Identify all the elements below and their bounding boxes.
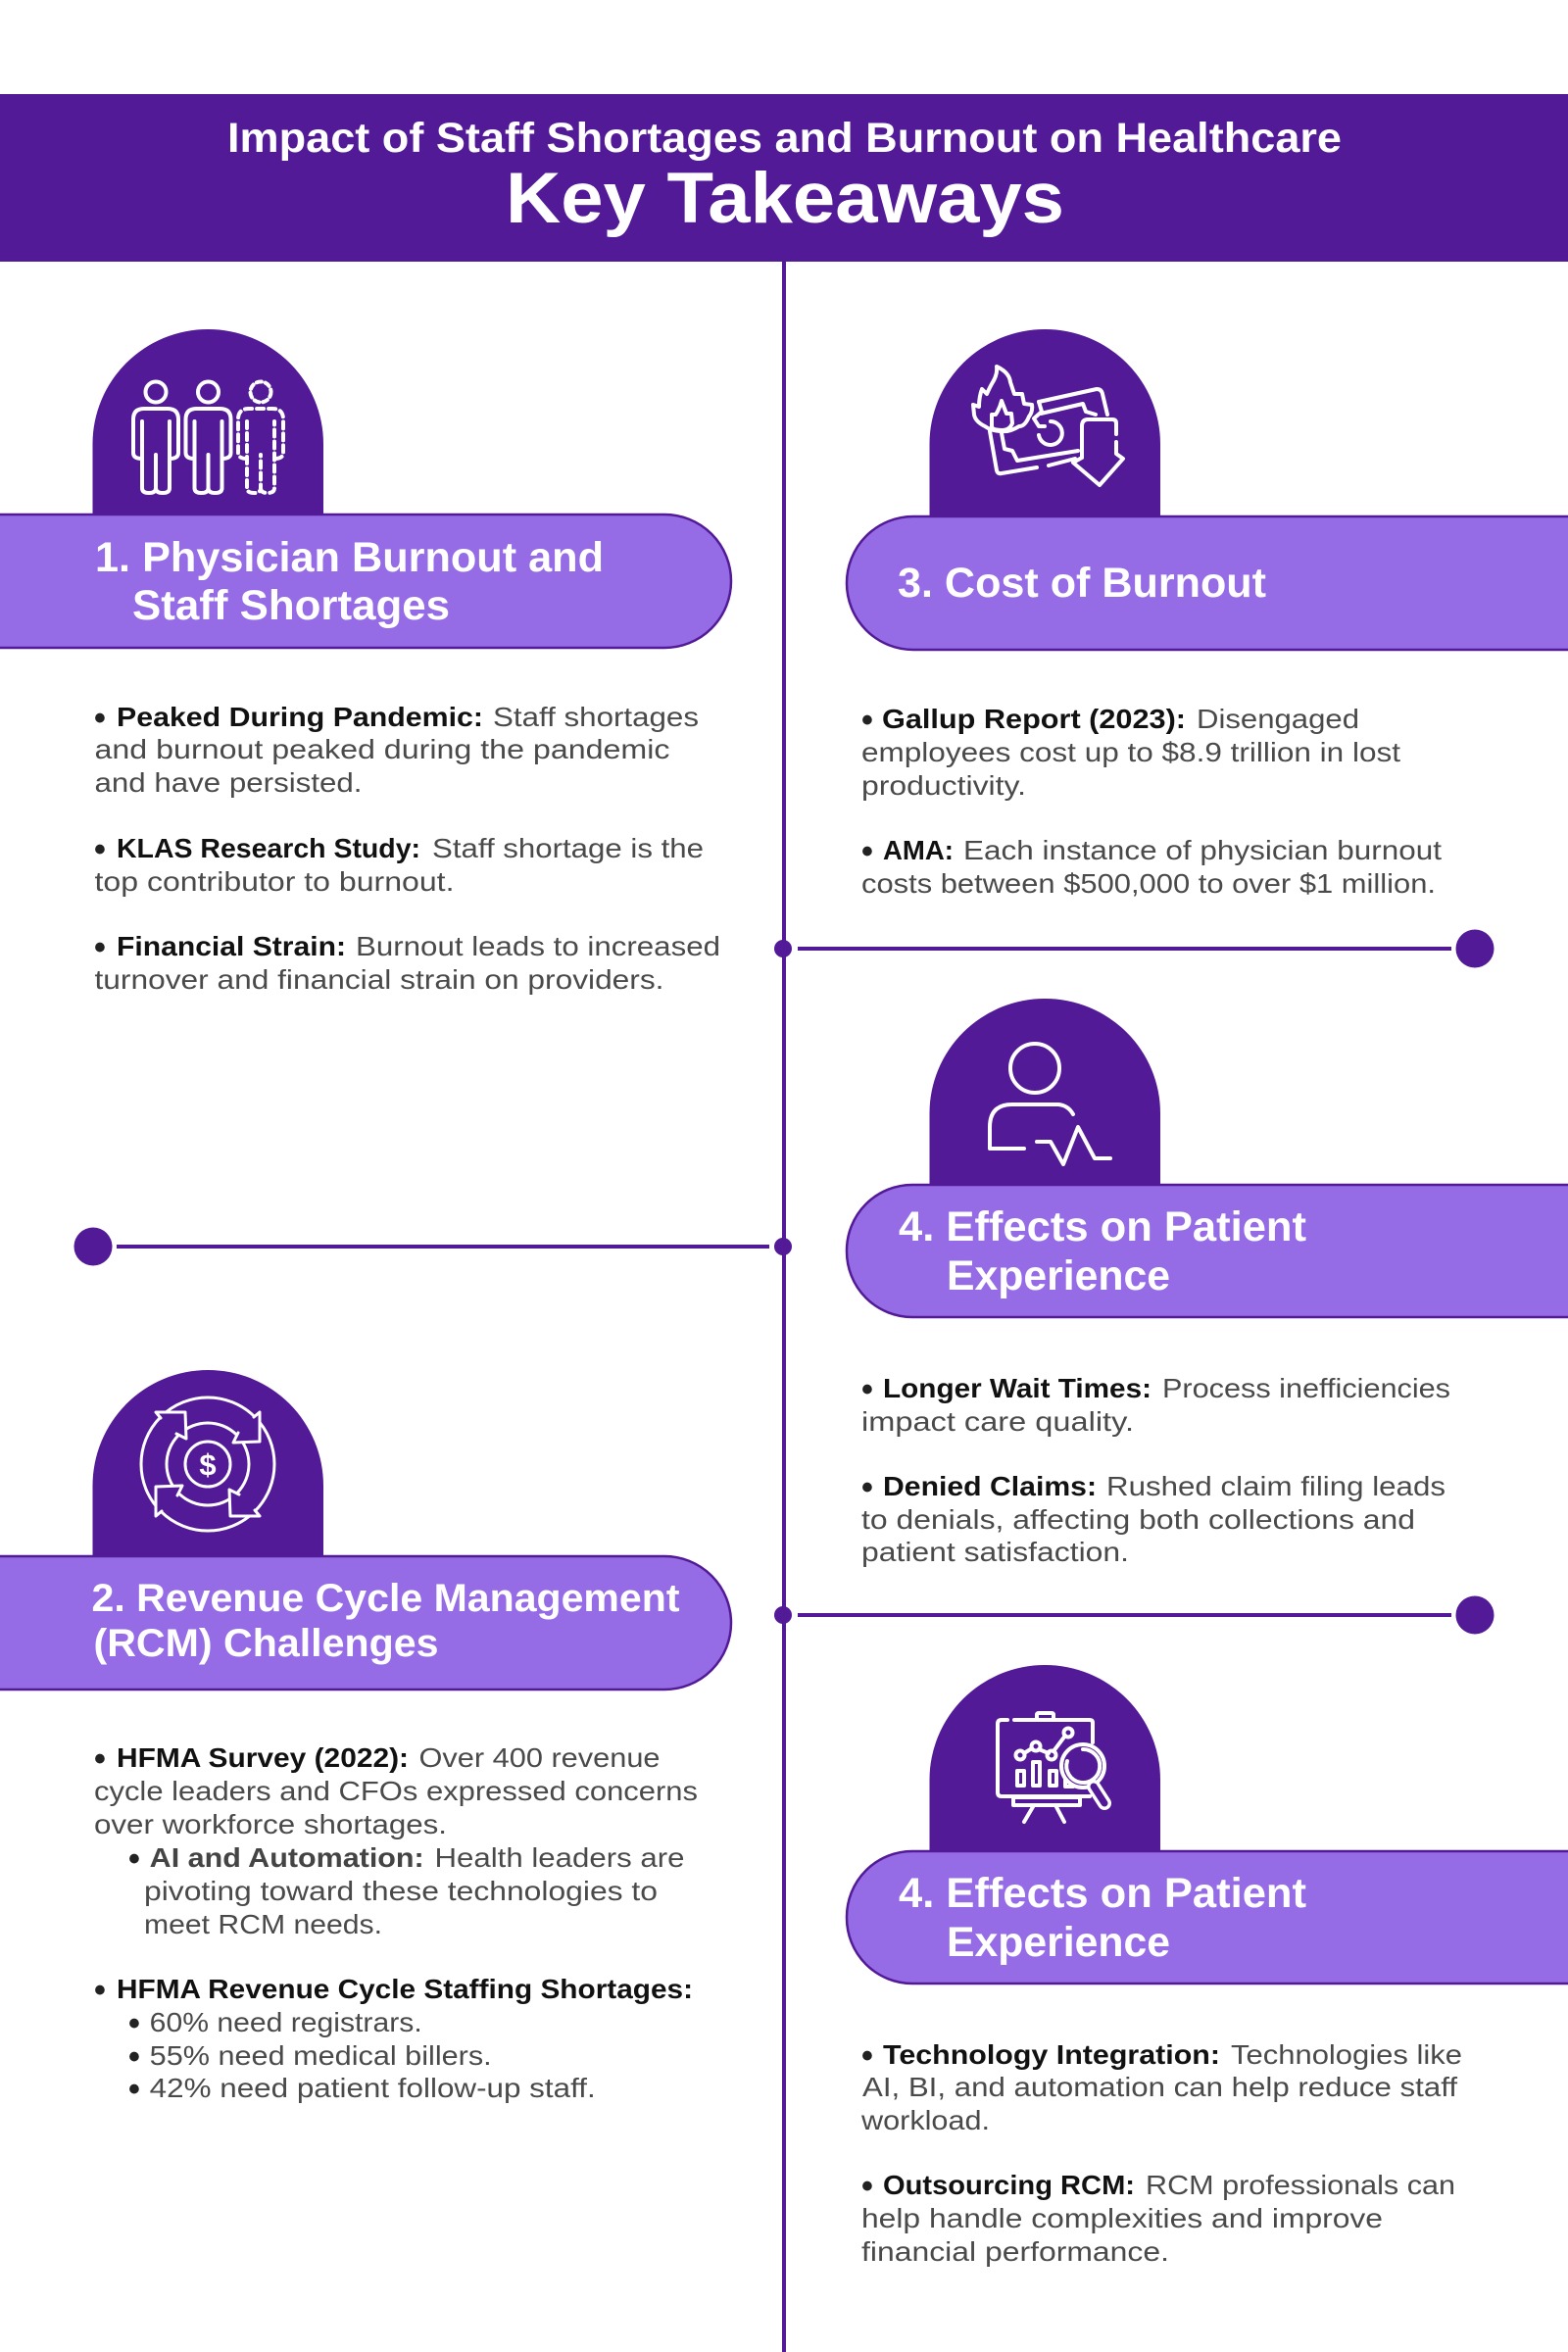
bullet: AMA: Each instance of physician burnout — [963, 835, 1442, 865]
bullet: HFMA survey: Over 400 revenue — [419, 1742, 661, 1773]
bullet: technology integration: workload. — [860, 2105, 990, 2135]
bullet: HFMA staffing shortages: • — [128, 2005, 140, 2042]
bullet: outsourcing RCM: financial performance. — [861, 2236, 1169, 2267]
bullet: denied claims: Denied Claims: — [883, 1471, 1097, 1501]
subtitle: Impact of Staff Shortages and Burnout on Healthcare — [227, 115, 1342, 162]
sub-bullet: AI and automation: • — [128, 1840, 140, 1878]
bullet: HFMA staffing shortages — [94, 1972, 693, 2108]
bullet: Gallup report: employees cost up to $8.9 trillion in lost — [861, 737, 1400, 767]
bullet: financial strain: Burnout leads to increased — [356, 931, 720, 961]
bullet: longer wait times: Longer Wait Times: — [883, 1373, 1152, 1403]
heading pill: 2. Revenue Cycle Management — [92, 1577, 680, 1620]
connector: section 4 to section 5 — [774, 1595, 1494, 1635]
heading pill: 4. Effects on Patient — [899, 1870, 1306, 1917]
bullet: technology integration: • — [861, 2037, 873, 2075]
bullet: denied claims: patient satisfaction. — [861, 1537, 1129, 1567]
bullet: KLAS research study — [94, 831, 704, 897]
sub-bullet: AI and automation — [128, 1840, 684, 1939]
bullet: outsourcing RCM: • — [861, 2168, 873, 2205]
heading pill: Staff Shortages — [132, 582, 450, 629]
bullet: outsourcing RCM — [861, 2168, 1455, 2267]
bullet: peaked during pandemic: Staff shortages — [493, 702, 699, 732]
heading pill — [847, 1851, 1568, 1984]
bullet: longer wait times: Process inefficiencies — [1162, 1373, 1450, 1403]
bullet: Gallup report — [861, 702, 1400, 801]
bullet: Gallup report: • — [861, 702, 873, 739]
heading pill: Experience — [947, 1919, 1170, 1966]
bullet: AMA: AMA: — [883, 835, 954, 865]
bullet: longer wait times: • — [861, 1371, 873, 1408]
bullet: HFMA staffing shortages: • — [94, 1972, 106, 2009]
central timeline spine — [782, 262, 786, 2352]
panel: effects on patient experience — [847, 999, 1568, 1567]
bullet: HFMA staffing shortages: 60% need registrars. — [150, 2007, 422, 2037]
bullet: KLAS research study: KLAS Research Study: — [117, 833, 420, 863]
bullet: outsourcing RCM: RCM professionals can — [1146, 2170, 1455, 2200]
bullet: peaked during pandemic: • — [94, 700, 106, 737]
icon badge: chart analysis — [929, 1665, 1160, 1852]
bullet: HFMA survey: over workforce shortages. — [94, 1809, 447, 1839]
connector: section 3 to section 4 — [774, 929, 1494, 968]
bullet: peaked during pandemic: and burnout peaked during the pandemic — [94, 734, 670, 764]
sub-bullet: AI and automation: Health leaders are — [435, 1842, 684, 1873]
bullet: HFMA survey — [94, 1740, 698, 1839]
icon badge: patient with pulse — [929, 999, 1160, 1186]
icon badge: burning money — [929, 329, 1160, 517]
bullet: HFMA staffing shortages: • — [128, 2071, 140, 2108]
bullet: HFMA staffing shortages: HFMA Revenue Cycle Staffing Shortages: — [117, 1974, 693, 2004]
bullet: peaked during pandemic: and have persisted. — [94, 767, 363, 798]
heading pill: 1. Physician Burnout and — [95, 534, 604, 581]
bullet: Gallup report: Disengaged — [1197, 704, 1359, 734]
icon badge: revenue cycle: $ — [199, 1447, 217, 1482]
icon badge: revenue cycle — [92, 1370, 323, 1558]
bullet: outsourcing RCM: Outsourcing RCM: — [883, 2170, 1135, 2200]
panel: effects on patient experience, technology — [847, 1665, 1568, 2267]
bullet: longer wait times: impact care quality. — [861, 1406, 1134, 1437]
bullet: technology integration: AI, BI, and automation can help reduce staff — [862, 2072, 1457, 2102]
bullet: peaked during pandemic: Peaked During Pandemic: — [117, 702, 483, 732]
heading pill — [847, 516, 1568, 650]
bullet: technology integration — [860, 2037, 1462, 2135]
bullet: denied claims: • — [861, 1469, 873, 1506]
bullet: denied claims: to denials, affecting both collections and — [861, 1504, 1415, 1535]
panel: physician burnout and staff shortages — [0, 329, 731, 995]
bullet: longer wait times — [861, 1371, 1450, 1437]
bullet: HFMA staffing shortages: 42% need patient follow-up staff. — [150, 2073, 596, 2103]
bullet: outsourcing RCM: help handle complexities and improve — [861, 2203, 1383, 2233]
bullet: AMA — [861, 833, 1442, 899]
sub-bullet: AI and automation: pivoting toward these technologies to — [144, 1876, 658, 1906]
heading pill — [847, 1185, 1568, 1317]
heading pill: (RCM) Challenges — [94, 1622, 439, 1665]
heading pill: 3. Cost of Burnout — [898, 560, 1266, 607]
bullet: HFMA staffing shortages: 55% need medical billers. — [150, 2040, 492, 2071]
sub-bullet: AI and automation: AI and Automation: — [150, 1842, 424, 1873]
bullet: technology integration: Technology Integration: — [883, 2039, 1220, 2070]
bullet: HFMA survey: HFMA Survey (2022): — [117, 1742, 409, 1773]
bullet: denied claims: Rushed claim filing leads — [1106, 1471, 1446, 1501]
panel: cost of burnout — [847, 329, 1568, 899]
bullet: AMA: • — [861, 833, 873, 870]
bullet: financial strain: turnover and financial strain on providers. — [94, 964, 664, 995]
bullet: financial strain — [94, 929, 720, 995]
bullet: HFMA survey: • — [94, 1740, 106, 1778]
heading pill: 4. Effects on Patient — [899, 1203, 1306, 1250]
heading pill: Experience — [947, 1252, 1170, 1299]
bullet: KLAS research study: top contributor to burnout. — [94, 866, 455, 897]
bullet: financial strain: • — [94, 929, 106, 966]
bullet: technology integration: Technologies like — [1231, 2039, 1462, 2070]
icon badge: staff shortage people — [92, 329, 323, 515]
heading pill — [0, 514, 731, 648]
bullet: financial strain: Financial Strain: — [117, 931, 346, 961]
bullet: AMA: costs between $500,000 to over $1 million. — [861, 868, 1436, 899]
bullet: HFMA staffing shortages: • — [128, 2038, 140, 2076]
panel: revenue cycle management challenges — [0, 1370, 731, 2108]
connector: section 1 to section 2 — [74, 1227, 792, 1266]
title: Key Takeaways — [506, 159, 1064, 238]
sub-bullet: AI and automation: meet RCM needs. — [144, 1909, 382, 1939]
bullet: denied claims — [861, 1469, 1446, 1567]
bullet: Gallup report: Gallup Report (2023): — [882, 704, 1186, 734]
bullet: Gallup report: productivity. — [861, 770, 1026, 801]
heading pill — [0, 1556, 731, 1690]
bullet: KLAS research study: Staff shortage is the — [432, 833, 704, 863]
header banner — [0, 94, 1568, 262]
bullet: KLAS research study: • — [94, 831, 106, 868]
bullet: HFMA survey: cycle leaders and CFOs expressed concerns — [94, 1776, 698, 1806]
bullet: peaked during pandemic — [94, 700, 699, 798]
